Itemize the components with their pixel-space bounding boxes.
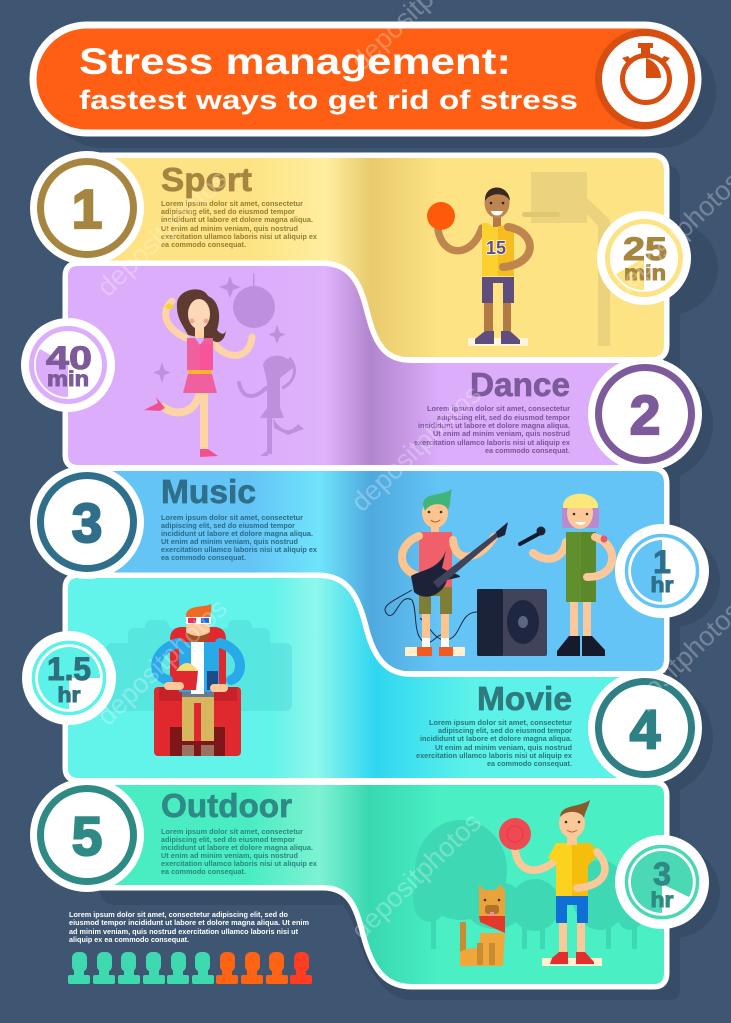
text block: outdoor: ea commodo consequat. — [161, 867, 246, 876]
character: dog — [460, 884, 505, 966]
panel: movie — [68, 578, 664, 778]
number badge 2 — [588, 357, 702, 471]
text block: music: Ut enim ad minim veniam, quis nostrud — [161, 537, 298, 546]
text block: sport: incididunt ut labore et dolore magna aliqua. — [161, 215, 313, 224]
panel: outdoor — [87, 785, 664, 984]
title: Stress management: — [79, 41, 511, 82]
heading: outdoor: Outdoor — [161, 787, 292, 824]
text block: music: exercitation ullamco laboris nisi ut aliquip ex — [161, 545, 318, 554]
text block: sport — [161, 199, 318, 249]
time badge: 1 hr — [615, 524, 709, 618]
character: basketball player — [427, 188, 530, 346]
text block: dance: ea commodo consequat. — [485, 446, 570, 455]
time badge: 1.5 hr: hr — [58, 684, 80, 707]
text block: movie: incididunt ut labore et dolore magna aliqua. — [420, 734, 572, 743]
text block: outdoor: Ut enim ad minim veniam, quis nostrud — [161, 851, 298, 860]
text block: dance: exercitation ullamco laboris nisi ut aliquip ex — [414, 438, 571, 447]
dancer shadow silhouette — [239, 356, 304, 456]
heading: movie: Movie — [477, 680, 572, 717]
icon: stopwatch — [595, 29, 695, 129]
panel: music — [87, 471, 664, 671]
character: singer — [520, 494, 612, 656]
text block: outdoor: incididunt ut labore et dolore magna aliqua. — [161, 843, 313, 852]
watermarks: depositphotos — [345, 807, 487, 945]
heading: music: Music — [161, 473, 256, 510]
disco ball and stars — [154, 274, 286, 383]
panel: dance — [68, 266, 664, 465]
footer text block: eiusmod tempor incididunt ut labore et dolore magna aliqua. Ut enim — [69, 918, 309, 927]
text block: sport: ea commodo consequat. — [161, 240, 246, 249]
text block: movie — [416, 718, 573, 768]
text block: movie: Ut enim ad minim veniam, quis nostrud — [435, 743, 572, 752]
heading: sport: Sport — [161, 161, 252, 198]
time badge: 25 min: 25 — [623, 231, 667, 267]
time badge: 3 hr: hr — [650, 889, 674, 912]
number badge 1: 1 — [72, 178, 102, 240]
text block: music — [161, 513, 318, 562]
time badge: 1 hr: hr — [650, 574, 674, 597]
number badge 5: 5 — [72, 805, 102, 867]
time badge: 1.5 hr: 1.5 — [47, 651, 91, 687]
footer text block: aliquip ex ea commodo consequat. — [69, 935, 189, 944]
footer text block: ad minim veniam, quis nostrud exercitation ullamco laboris nisi ut — [69, 927, 298, 936]
text block: movie: Lorem ipsum dolor sit amet, consectetur — [429, 718, 572, 727]
time badge: 40 min — [21, 318, 115, 412]
time badge: 3 hr: 3 — [653, 856, 671, 892]
basketball hoop background — [522, 172, 610, 346]
text block: music: Lorem ipsum dolor sit amet, consectetur — [161, 513, 303, 522]
text block: dance — [414, 404, 571, 455]
trees background — [413, 820, 643, 949]
time badge: 40 min: min — [47, 368, 89, 391]
text block: dance: adipiscing elit, sed do eiusmod tempor — [437, 413, 570, 422]
time badge: 25 min — [597, 211, 691, 305]
text block: sport: exercitation ullamco laboris nisi ut aliquip ex — [161, 232, 318, 241]
time badge: 3 hr — [615, 835, 709, 929]
time badge: 1.5 hr — [22, 631, 116, 725]
number badge 3 — [30, 465, 144, 579]
number badge 4: 4 — [630, 698, 661, 760]
watermarks: depositphotos — [91, 164, 233, 302]
character: man with frisbee — [499, 800, 605, 966]
character: dancer — [144, 289, 252, 457]
character: guitarist — [385, 489, 508, 656]
text block: dance: Ut enim ad minim veniam, quis nostrud — [433, 429, 570, 438]
text block: movie: adipiscing elit, sed do eiusmod tempor — [438, 726, 572, 735]
text block: movie: exercitation ullamco laboris nisi ut aliquip ex — [416, 751, 573, 760]
time badge: 1 hr: 1 — [653, 544, 671, 580]
time badge: 40 min: 40 — [46, 340, 92, 376]
cinema seats background — [106, 620, 292, 711]
footer text block: Lorem ipsum dolor sit amet, consectetur adipiscing elit, sed do — [69, 910, 288, 919]
text block: dance: incididunt ut labore et dolore magna aliqua. — [418, 421, 570, 430]
character: basketball player: 15 — [486, 238, 506, 258]
number badge 3: 3 — [72, 492, 102, 554]
watermarks: depositphotos — [91, 593, 233, 731]
text block: music: ea commodo consequat. — [161, 553, 246, 562]
text block: movie: ea commodo consequat. — [487, 759, 572, 768]
text block: outdoor: Lorem ipsum dolor sit amet, consectetur — [161, 827, 303, 836]
number badge 5 — [30, 778, 144, 892]
heading: dance: Dance — [470, 366, 570, 403]
people pictogram row — [68, 952, 312, 984]
text block: outdoor: exercitation ullamco laboris nisi ut aliquip ex — [161, 859, 318, 868]
text block: music: incididunt ut labore et dolore magna aliqua. — [161, 529, 313, 538]
footer text block — [69, 910, 309, 944]
character: moviegoer in seat — [154, 604, 241, 756]
number badge 1 — [30, 151, 144, 265]
text block: sport: adipiscing elit, sed do eiusmod tempor — [161, 207, 295, 216]
text block: sport: Lorem ipsum dolor sit amet, consectetur — [161, 199, 303, 208]
text block: dance: Lorem ipsum dolor sit amet, consectetur — [427, 404, 570, 413]
panel: sport — [87, 158, 664, 357]
text block: outdoor — [161, 827, 318, 876]
text block: music: adipiscing elit, sed do eiusmod tempor — [161, 521, 295, 530]
text block: sport: Ut enim ad minim veniam, quis nostrud — [161, 224, 298, 233]
text block: outdoor: adipiscing elit, sed do eiusmod tempor — [161, 835, 295, 844]
subtitle: fastest ways to get rid of stress — [79, 85, 578, 115]
watermarks: depositphotos — [345, 379, 487, 517]
time badge: 25 min: min — [624, 262, 666, 285]
header banner — [33, 25, 698, 133]
number badge 2: 2 — [630, 384, 660, 446]
number badge 4 — [588, 671, 702, 785]
amplifier — [477, 589, 547, 656]
